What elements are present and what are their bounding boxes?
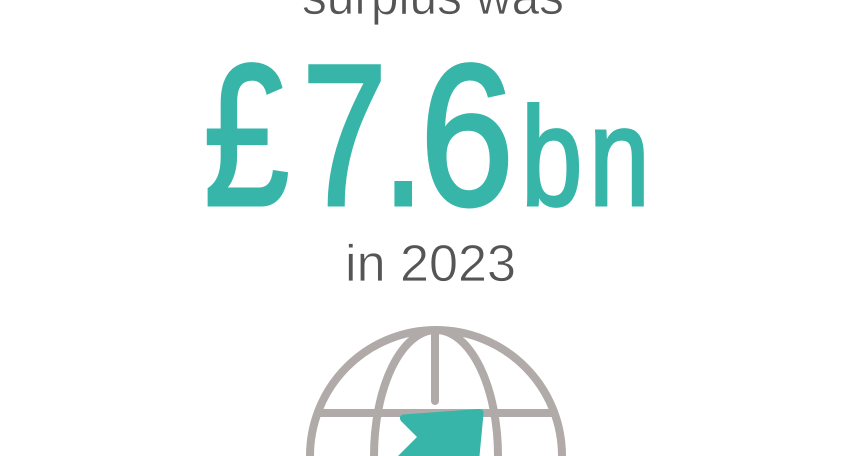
headline figure: £7.6bn: £ [204,22,289,247]
headline figure: £7.6bn: b [521,78,583,235]
icon: globe with teal flag [310,330,562,456]
text: in 2023: in 2023 [345,235,516,293]
headline figure: £7.6bn: n [589,78,650,235]
headline figure: £7.6bn: . [382,22,424,247]
headline figure: £7.6bn: 6 [420,24,514,248]
headline figure: £7.6bn: 7 [302,22,387,247]
headline figure: £7.6bn [204,22,650,248]
